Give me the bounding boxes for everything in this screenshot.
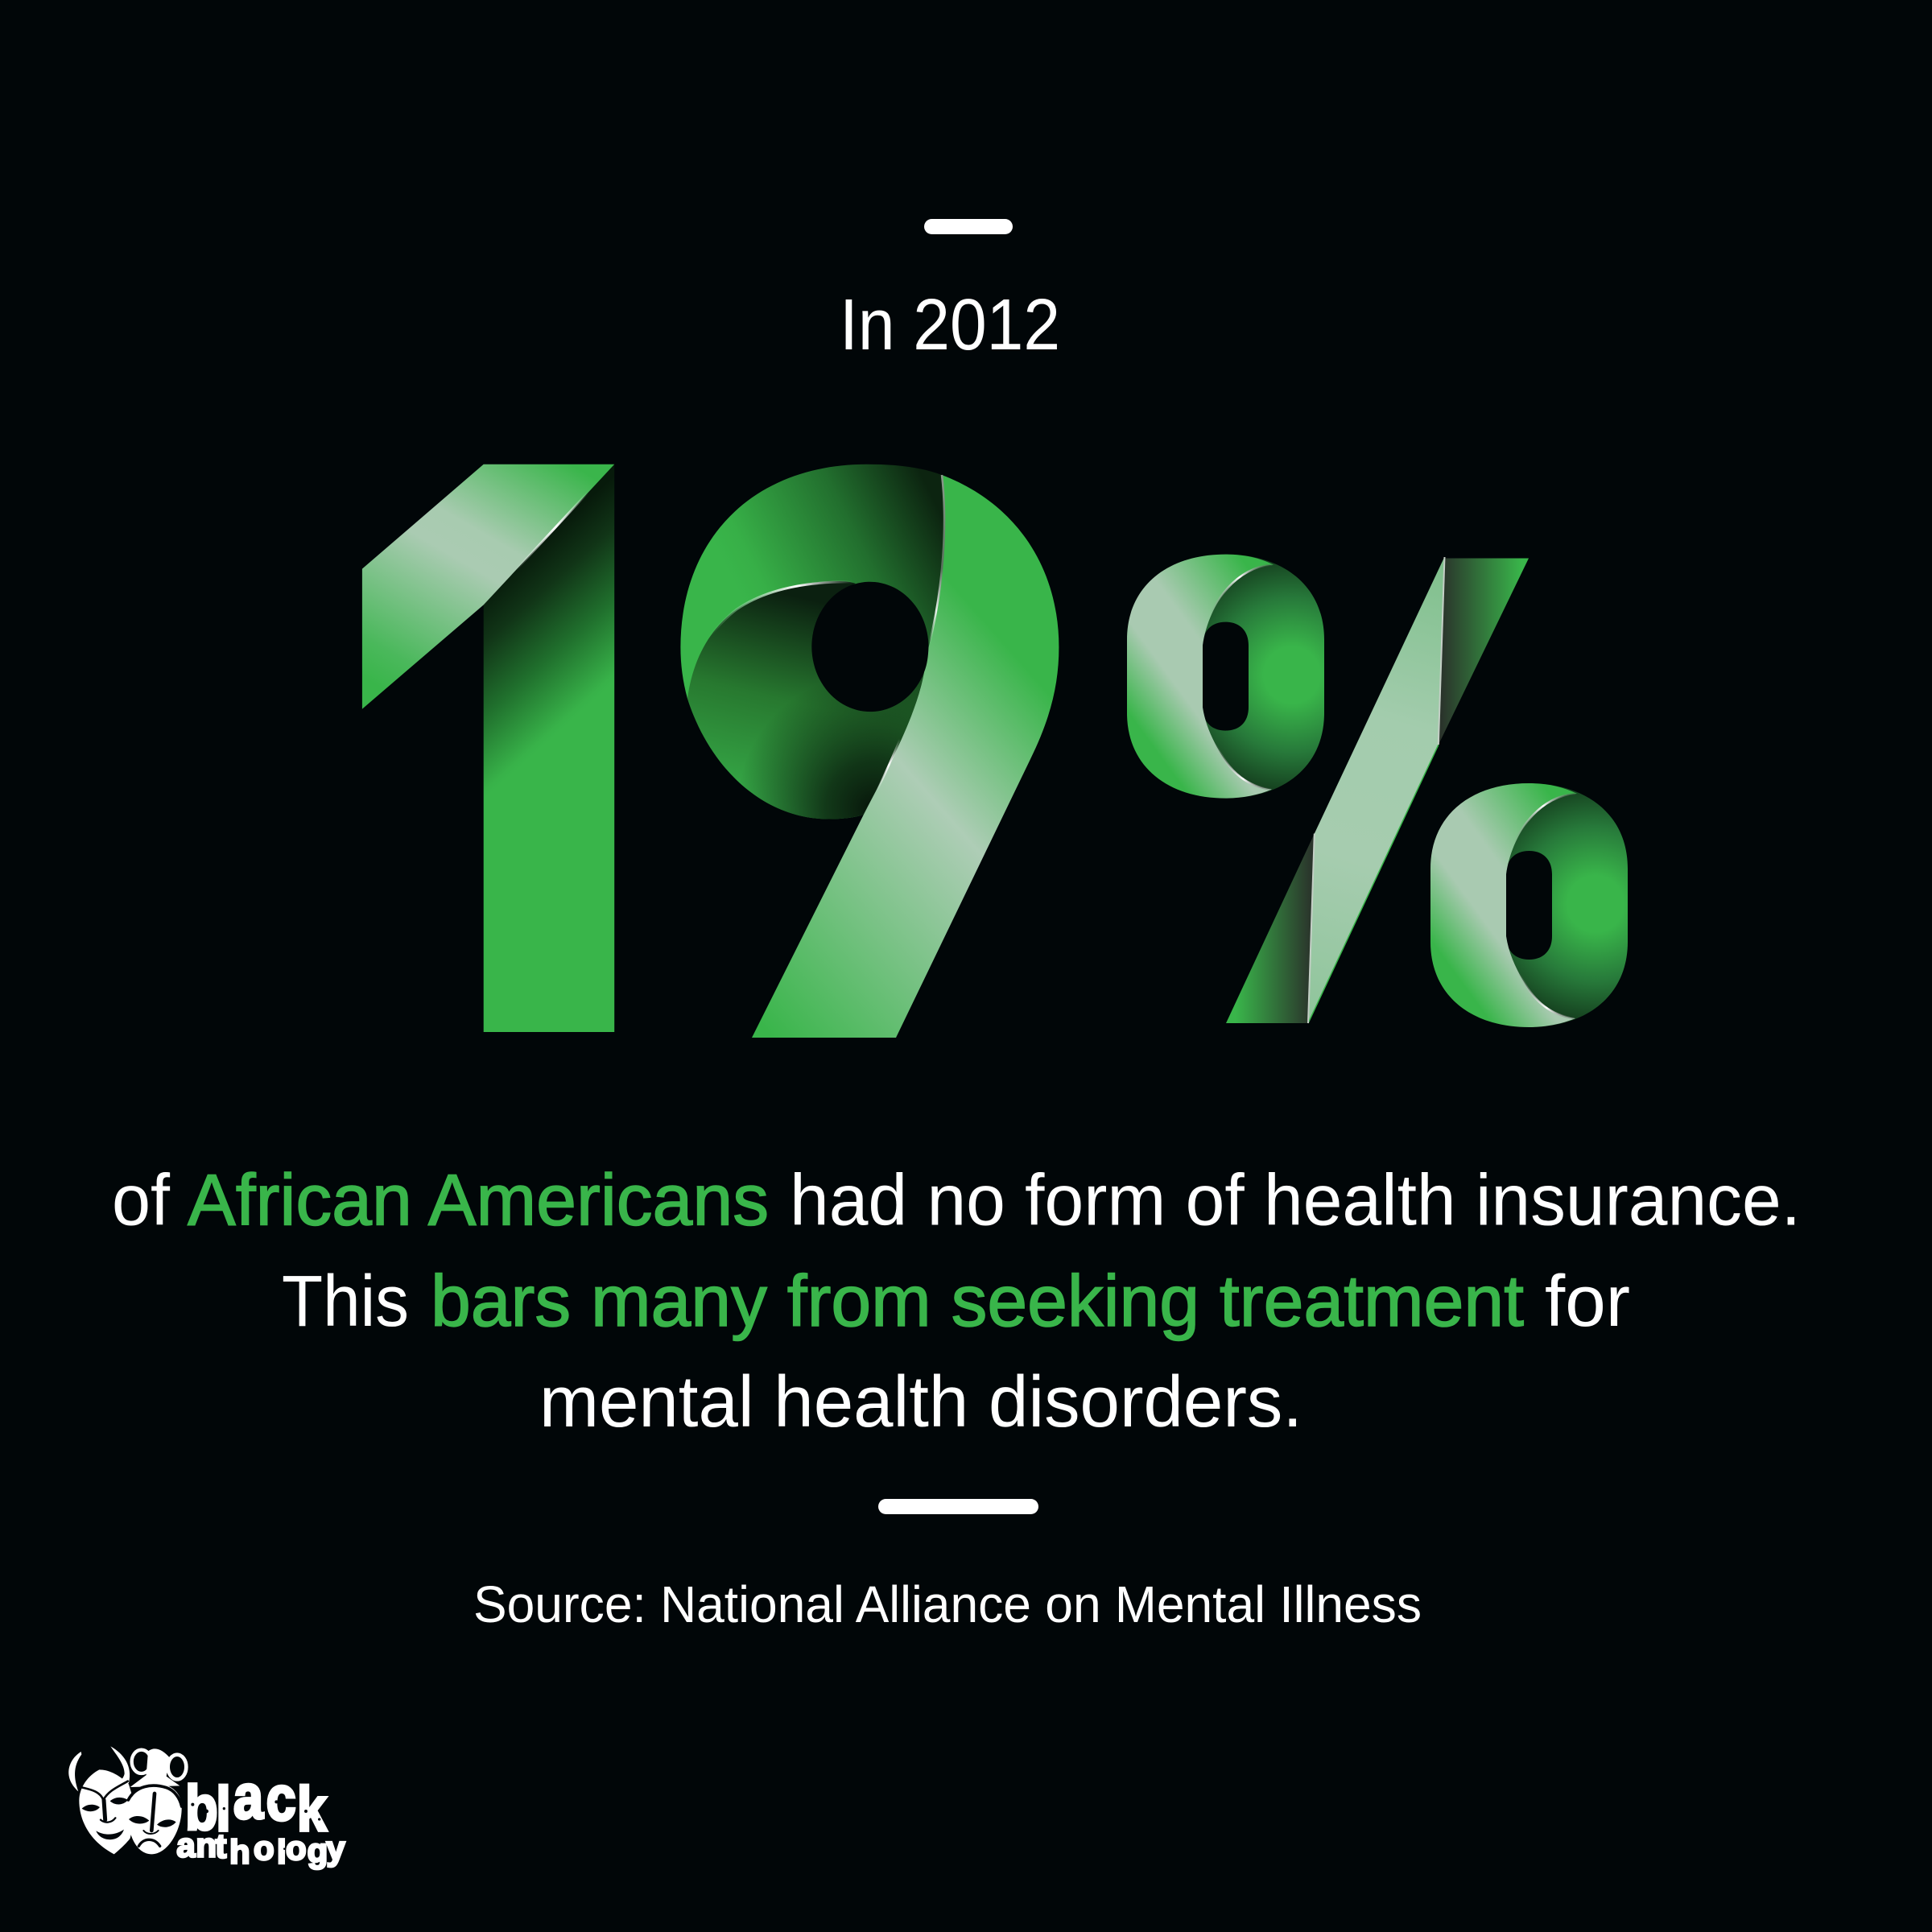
slash [1226,557,1529,1023]
upper zero [1127,555,1324,799]
logo: black anthology [68,1746,345,1871]
body text line 1: of [112,1161,171,1241]
slash bottom triangle [1226,834,1315,1023]
logo letter speckles [191,1800,320,1852]
body text line 1 [112,1161,1801,1241]
big number: 19% [362,464,1628,1038]
digit 9 front ribbon [752,475,1059,1038]
icon: theatre masks [68,1746,186,1854]
heading: In 2012: In 2012 [840,285,1060,365]
lower zero highlights [1511,794,1575,1018]
upper zero front [1127,555,1274,799]
top dash [924,219,1013,234]
digit 1 stem [484,464,614,1032]
upper zero back [1127,555,1324,799]
digit 1 fold highlight [515,492,588,571]
digit 1 [362,464,614,1032]
digit 9 inner bowl shadow [687,581,924,819]
slash main band [1308,558,1444,1023]
left mask [68,1746,137,1854]
lower zero [1430,783,1628,1027]
digit 9 inner bowl [687,581,924,819]
body text line 1: African Americans [188,1161,769,1241]
body text line 2: bars many from seeking treatment [431,1261,1524,1342]
slash top triangle [1439,559,1529,745]
digit 1 folded flag [362,464,614,709]
logo word: black: black [185,1761,327,1844]
source line: Source: National Alliance on Mental Illness [473,1575,1422,1633]
body text line 2: for [1545,1261,1630,1342]
digit 9 bowl highlight [708,582,853,638]
percent sign [1127,555,1628,1027]
upper zero highlights [1208,565,1272,790]
lower zero back [1430,783,1628,1027]
slash edge lines [1308,557,1444,1023]
digit 9 lower highlight [877,739,900,791]
logo word: anthology: anthology [176,1827,345,1871]
body text line 3: mental health disorders. [539,1362,1302,1443]
right mask [128,1748,186,1854]
digit 9 upper bowl [680,464,944,699]
lower dash [878,1499,1038,1514]
digit 9 [680,464,1059,1038]
body text line 2: This [282,1261,409,1342]
digit 9 crease highlight [929,475,944,647]
lower zero front [1430,783,1577,1027]
body text line 1: had no form of health insurance. [790,1161,1801,1241]
